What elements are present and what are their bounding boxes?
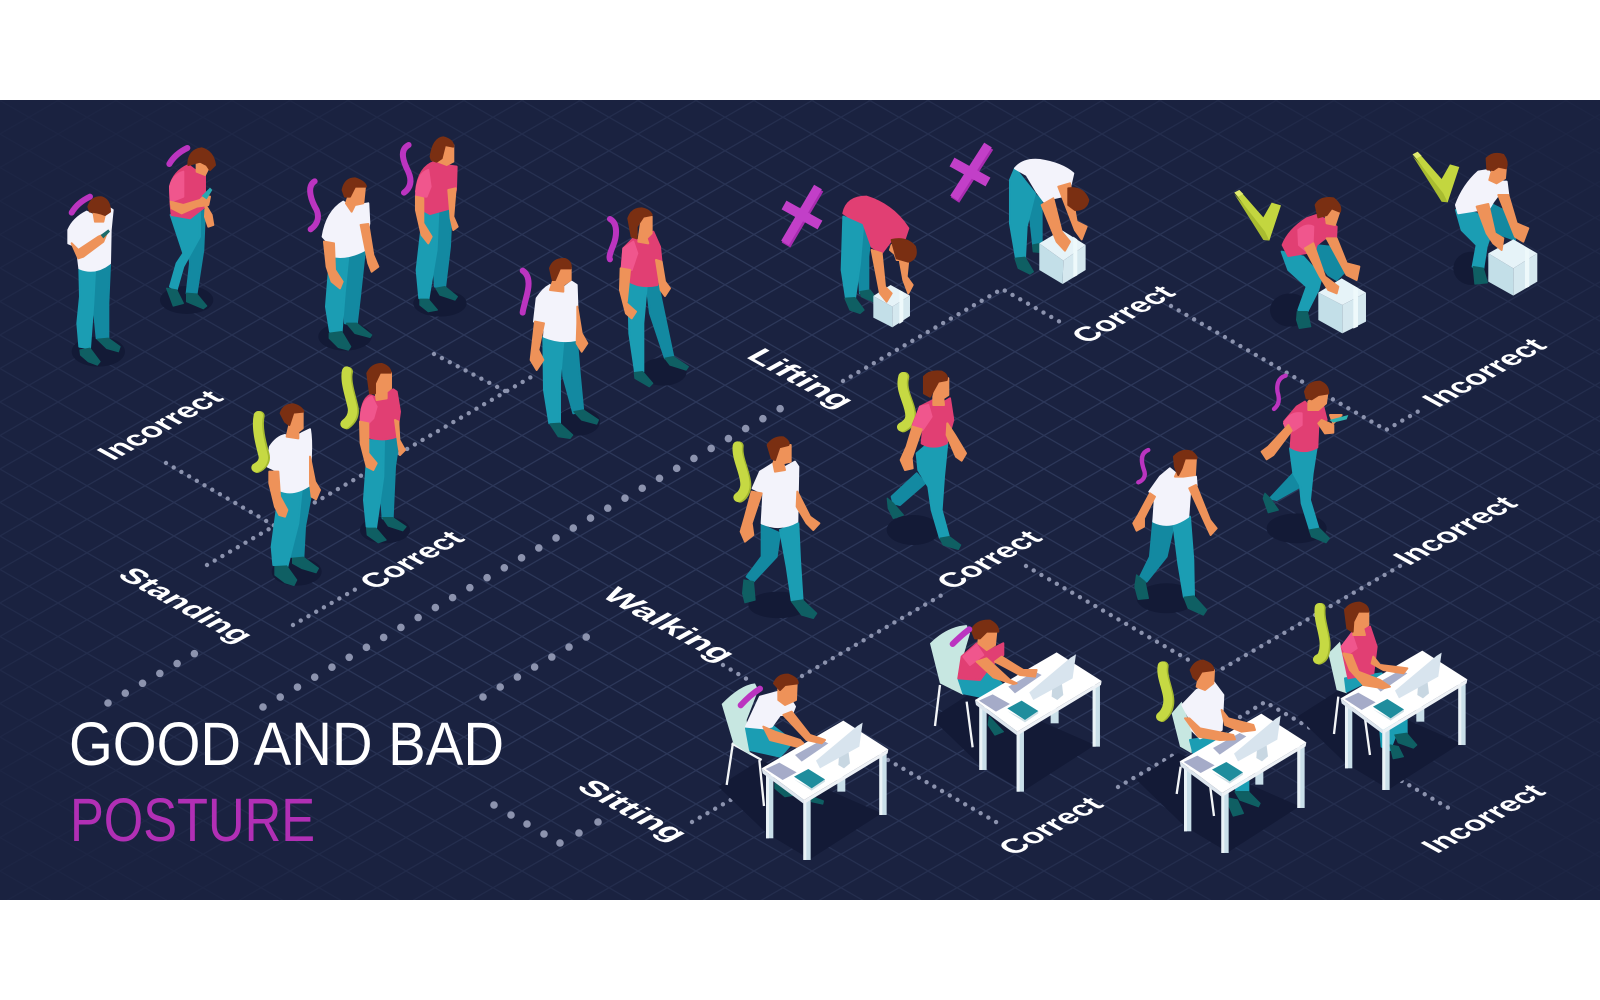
- figure: woman sitting incorrect at desk: [930, 621, 1102, 792]
- figure: woman bending over box, incorrect lifting: [842, 197, 916, 327]
- figure: man squatting with box, correct lifting: [1453, 154, 1537, 296]
- figure: woman walking with phone, incorrect: [1262, 376, 1348, 543]
- figure: man with phone, incorrect standing: [68, 197, 125, 367]
- label: Incorrect (standing): Incorrect: [90, 386, 231, 464]
- figure: man bending over box, incorrect lifting: [1010, 160, 1088, 284]
- title: GOOD AND BAD: [69, 710, 504, 778]
- label: Correct (sitting): Correct: [991, 793, 1111, 859]
- isometric floor grid: [0, 100, 1600, 900]
- panel: dark background: [0, 100, 1600, 900]
- label: Correct (standing): Correct: [352, 527, 472, 593]
- label: Standing: Standing: [110, 563, 261, 647]
- label: Correct (lifting): Correct: [1064, 281, 1183, 347]
- icon: check mark, man: [1413, 152, 1459, 202]
- figure: woman walking correct: [887, 371, 966, 549]
- title: POSTURE: [70, 786, 315, 854]
- figure: woman with phone, incorrect standing: [160, 148, 215, 314]
- figure: slouching man: [310, 178, 378, 351]
- label: Lifting: Lifting: [739, 344, 862, 413]
- figure: man standing correct: [256, 404, 322, 586]
- figure: man standing slouch: [523, 259, 600, 438]
- icon: X mark, man: [952, 145, 989, 200]
- figure: woman standing correct: [345, 364, 410, 543]
- title: [69, 710, 504, 854]
- figure: man sitting correct at desk: [1136, 661, 1306, 853]
- label: Correct (walking): Correct: [929, 526, 1050, 593]
- label: Walking: Walking: [594, 583, 743, 666]
- figure: man walking correct: [737, 437, 819, 618]
- icon: X mark, woman: [784, 187, 820, 245]
- figure: man sitting incorrect at desk: [718, 675, 888, 860]
- label: Sitting: Sitting: [569, 775, 696, 846]
- figure: woman sitting correct at desk: [1297, 603, 1467, 790]
- label: Incorrect (sitting): Incorrect: [1414, 780, 1553, 857]
- figure: woman squatting with box, correct lifting: [1270, 198, 1366, 333]
- dotted connectors: [108, 289, 1452, 847]
- figure: woman standing slouch: [609, 208, 688, 387]
- figure: slouching woman: [403, 137, 467, 317]
- label: Incorrect (walking): Incorrect: [1386, 492, 1525, 569]
- figure: man walking incorrect: [1133, 450, 1217, 615]
- label: Incorrect (lifting): Incorrect: [1415, 334, 1554, 411]
- icon: check mark, woman: [1234, 190, 1281, 241]
